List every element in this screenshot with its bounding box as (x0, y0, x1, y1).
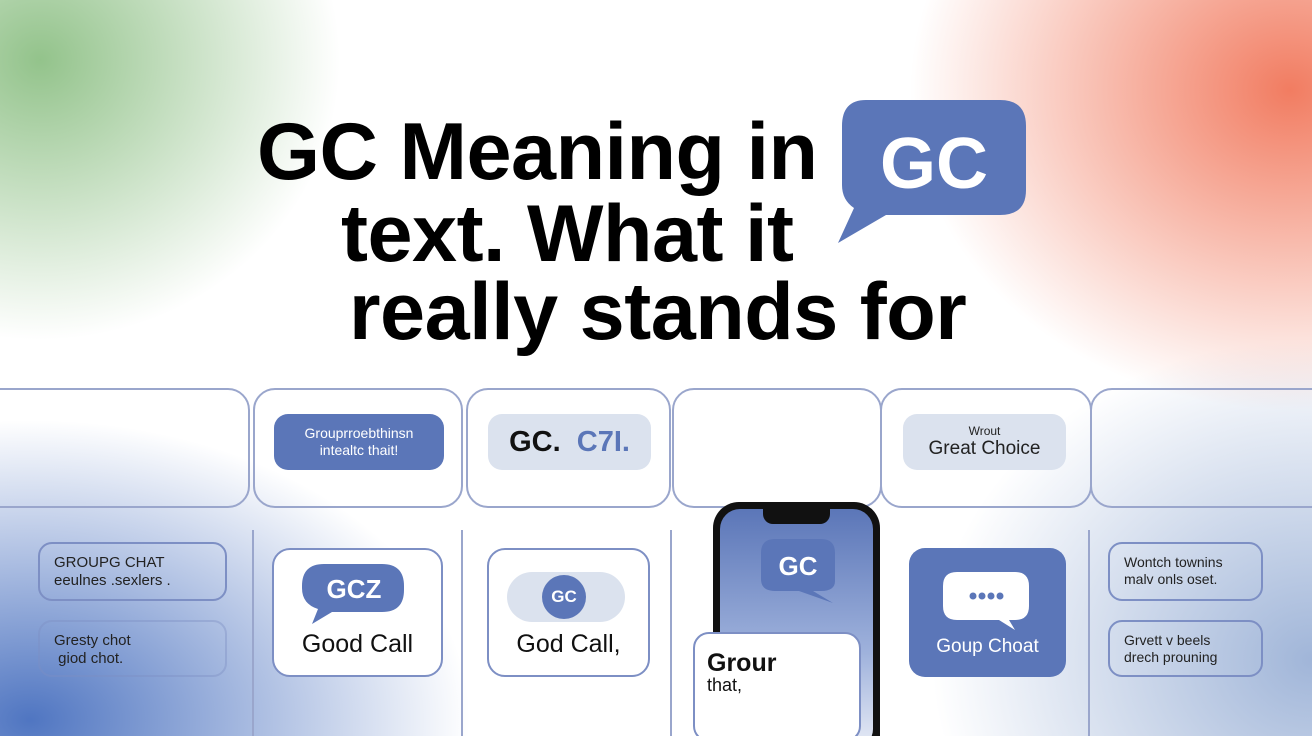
pill: Great Choice: Wrout (969, 424, 1000, 438)
right box: grvett (1108, 620, 1263, 677)
right box: grvett: Grvett v beels (1124, 632, 1210, 648)
icon: GC speech bubble (838, 100, 1026, 243)
left box: group chat: eeulnes .sexlers . (54, 572, 171, 589)
icon: chat bubble dots (943, 572, 1029, 630)
pill: GC. C7I.: GC. C7I. (509, 426, 630, 458)
card: Good Call (272, 548, 443, 677)
title: GC Meaning in (257, 107, 818, 197)
right box: grvett: drech prouning (1124, 649, 1217, 665)
icon: phone GC bubble (761, 539, 835, 603)
card: Group Chat blue (909, 548, 1066, 677)
left box: gresty chot (38, 620, 227, 677)
icon: GC circle: GC (551, 587, 577, 606)
pill: Great Choice (903, 414, 1066, 470)
title (257, 107, 966, 357)
title: text. What it (341, 189, 794, 279)
card: Grour that: that, (707, 675, 742, 695)
icon: GCZ bubble: GCZ (327, 574, 382, 604)
left box: gresty chot: giod chot. (58, 650, 123, 667)
phone (713, 502, 880, 736)
pill: group text (274, 414, 444, 470)
pill: GC. C7I. (488, 414, 651, 470)
pill: group text: Grouprroebthinsn (305, 425, 413, 441)
card: Grour that: Grour (707, 649, 776, 677)
icon: GC speech bubble: GC (880, 124, 988, 204)
top row card outlines (0, 388, 1312, 508)
icon: GC circle (542, 575, 586, 619)
card: Grour that (693, 632, 861, 736)
card: God Call: God Call, (516, 630, 621, 658)
card: Good Call: Good Call (302, 630, 413, 658)
icon: GCZ bubble (302, 564, 404, 624)
left box: group chat: GROUPG CHAT (54, 554, 165, 571)
card: God Call (487, 548, 650, 677)
left box: group chat (38, 542, 227, 601)
pill: Great Choice: Great Choice (929, 438, 1040, 459)
right box: wontch: Wontch townins (1124, 554, 1223, 570)
right box: wontch (1108, 542, 1263, 601)
pill: group text: intealtc thait! (320, 442, 398, 458)
title: really stands for (349, 267, 966, 357)
icon: phone GC bubble: GC (778, 551, 818, 581)
right box: wontch: malv onls oset. (1124, 571, 1217, 587)
card: Group Chat blue: Goup Choat (936, 636, 1039, 657)
left box: gresty chot: Gresty chot (54, 632, 131, 649)
